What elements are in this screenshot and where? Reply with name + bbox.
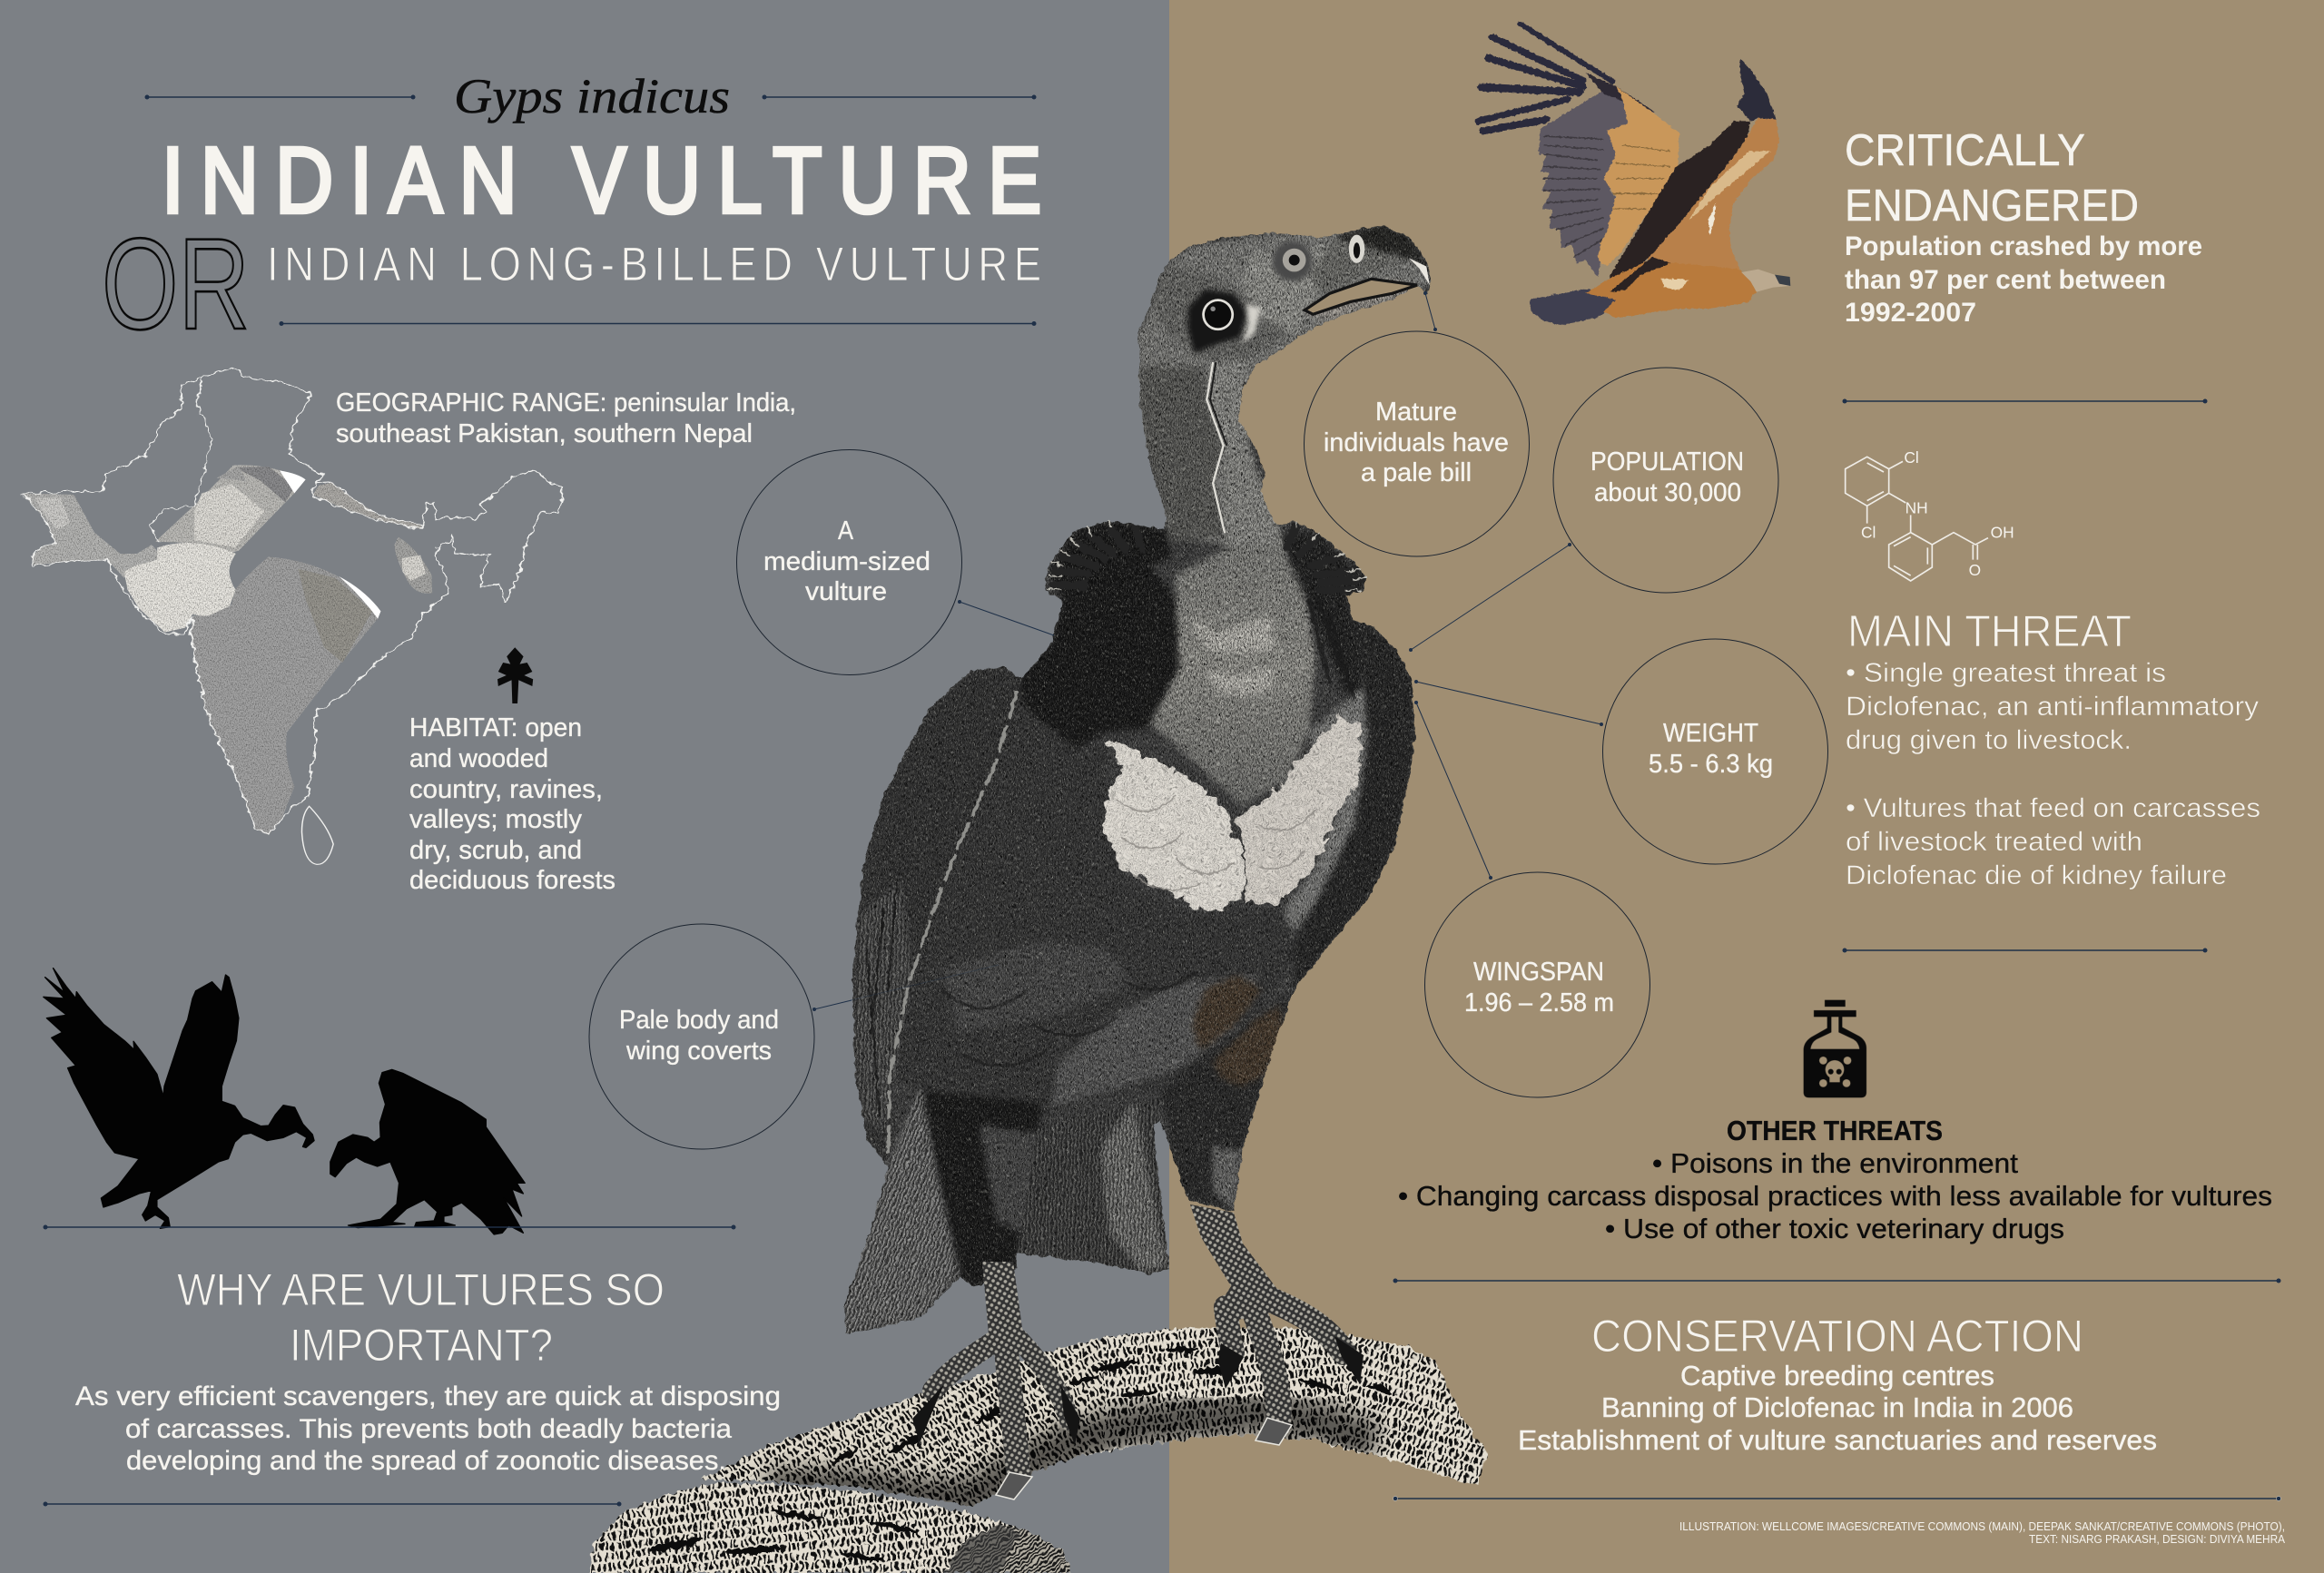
thighs and tail [1158, 991, 1292, 1212]
chemical structure of diclofenac: O [1969, 561, 1981, 579]
subtitle with outlined OR: OR [102, 212, 250, 357]
geographic range text [336, 388, 796, 448]
why important body text [44, 1381, 781, 1507]
other threats: • Poisons in the environment [1652, 1147, 2018, 1179]
population crash text [1843, 231, 2208, 403]
dark shoulder and ruff [1017, 521, 1179, 750]
population crash text: 1992-2007 [1845, 298, 1976, 328]
chemical structure of diclofenac: Cl [1904, 448, 1919, 467]
population crash text: than 97 per cent between [1845, 265, 2166, 295]
map of the Indian subcontinent [22, 368, 563, 864]
callout: weight: WEIGHT [1663, 719, 1758, 748]
nostril [1349, 235, 1364, 263]
heading: why are vultures so important: WHY ARE VULTURES SO [177, 1264, 665, 1315]
ruff tufts [1047, 521, 1366, 592]
habitat text: and wooded [409, 744, 548, 773]
callout: weight [1414, 639, 1828, 864]
icon: tree [497, 647, 533, 703]
main threat bullets: Diclofenac, an anti-inflammatory [1846, 692, 2259, 722]
engraved detail lines [867, 883, 896, 1116]
conservation action heading: CONSERVATION ACTION [1591, 1311, 2083, 1362]
background: tan right panel [1169, 0, 2324, 1573]
callout: wingspan [1414, 701, 1650, 1097]
photo: griffon vulture in flight [1478, 25, 1790, 325]
main threat bullets [1843, 658, 2260, 953]
neck seam [1206, 362, 1225, 533]
habitat text: valleys; mostly [409, 805, 582, 834]
other threats: OTHER THREATS [1727, 1115, 1943, 1146]
main threat bullets: Diclofenac die of kidney failure [1846, 860, 2227, 890]
critically endangered heading: ENDANGERED [1845, 182, 2139, 231]
feather line overlays [844, 1088, 959, 1333]
callout: mature individuals have a pale bill: individuals have [1324, 428, 1509, 457]
subtitle with outlined OR [102, 212, 1041, 357]
credits: TEXT: NISARG PRAKASH, DESIGN: DIVIYA MEHRA [2029, 1532, 2285, 1546]
other threats: • Use of other toxic veterinary drugs [1605, 1213, 2064, 1244]
main threat bullets: of livestock treated with [1846, 827, 2142, 857]
branch [590, 1327, 1487, 1573]
habitat text: dry, scrub, and [409, 836, 582, 865]
geographic range text: southeast Pakistan, southern Nepal [336, 419, 753, 448]
callout: wingspan: WINGSPAN [1473, 958, 1604, 987]
bill gape [1305, 279, 1417, 314]
other threats [1393, 1115, 2280, 1283]
callout: medium-sized vulture: medium-sized [763, 547, 931, 576]
callout: pale body and wing coverts: wing coverts [625, 1037, 772, 1066]
habitat text: deciduous forests [409, 866, 615, 895]
habitat text: country, ravines, [409, 775, 603, 804]
head and neck [1134, 225, 1433, 546]
callout: population [1409, 368, 1778, 652]
illustration: Indian vulture engraving [843, 225, 1431, 1334]
chest shield [1142, 546, 1315, 806]
background: grey left panel [0, 0, 1169, 1573]
critically endangered heading: CRITICALLY [1845, 126, 2085, 175]
main threat bullets: • Vultures that feed on carcasses [1846, 793, 2260, 823]
chemical structure of diclofenac: OH [1991, 524, 2014, 542]
callout: population: POPULATION [1590, 447, 1744, 477]
callout: mature individuals have a pale bill [1304, 291, 1529, 556]
callout: population: about 30,000 [1594, 478, 1741, 507]
callout: pale body and wing coverts [589, 924, 852, 1149]
upper eye [1272, 241, 1312, 281]
chemical structure of diclofenac: Cl [1861, 524, 1876, 542]
beak [1333, 225, 1429, 272]
other threats: • Changing carcass disposal practices with less available for vultures [1398, 1180, 2272, 1212]
why important body text: developing and the spread of zoonotic diseases. [126, 1446, 726, 1476]
callout: medium-sized vulture [737, 450, 1054, 675]
callout: wingspan: 1.96 – 2.58 m [1464, 988, 1614, 1018]
conservation action list: Banning of Diclofenac in India in 2006 [1601, 1391, 2073, 1423]
why important body text: of carcasses. This prevents both deadly bacteria [125, 1414, 732, 1444]
species name with rules [145, 69, 1037, 123]
silhouettes of two vultures on a rule [44, 968, 735, 1234]
chemical structure of diclofenac: NH [1905, 498, 1928, 516]
main threat heading: MAIN THREAT [1847, 607, 2132, 656]
right wing [1292, 621, 1415, 989]
callout: mature individuals have a pale bill: a pale bill [1361, 458, 1472, 487]
callout: pale body and wing coverts: Pale body and [619, 1006, 779, 1035]
subtitle with outlined OR: INDIAN LONG-BILLED VULTURE [267, 238, 1041, 291]
icon: poison bottle [1804, 1000, 1866, 1097]
conservation action list [1393, 1360, 2280, 1501]
credits [1679, 1519, 2285, 1546]
habitat text: HABITAT: open [409, 713, 582, 742]
heading: why are vultures so important [177, 1264, 665, 1371]
callout: medium-sized vulture: vulture [805, 577, 887, 606]
callout: weight: 5.5 - 6.3 kg [1649, 750, 1773, 779]
why important body text: As very efficient scavengers, they are quick at disposing [75, 1381, 781, 1411]
population crash text: Population crashed by more [1845, 231, 2202, 261]
callout: mature individuals have a pale bill: Mature [1375, 398, 1457, 427]
geographic range text: GEOGRAPHIC RANGE: peninsular India, [336, 388, 796, 418]
critically endangered heading [1845, 126, 2139, 231]
main threat bullets: • Single greatest threat is [1846, 658, 2166, 688]
title: INDIAN VULTURE [162, 129, 1041, 233]
white patches [1102, 716, 1363, 912]
faint leader through the body [851, 965, 999, 1000]
conservation action list: Captive breeding centres [1680, 1360, 1994, 1391]
species name with rules: Gyps indicus [454, 69, 730, 123]
conservation action list: Establishment of vulture sanctuaries and reserves [1518, 1424, 2157, 1456]
chemical structure of diclofenac [1846, 448, 2014, 581]
rust stains [1192, 975, 1261, 1050]
habitat text [409, 713, 615, 895]
feet with scales and claws [912, 1204, 1364, 1499]
large eye [1188, 290, 1247, 354]
callout: medium-sized vulture: A [838, 516, 854, 546]
main threat bullets: drug given to livestock. [1846, 725, 2132, 755]
lower body [902, 710, 1293, 1109]
credits: ILLUSTRATION: WELLCOME IMAGES/CREATIVE COMMONS (MAIN), DEEPAK SANKAT/CREATIVE COMMONS (PHOTO), [1679, 1519, 2285, 1533]
left wing [852, 666, 1021, 1167]
heading: why are vultures so important: IMPORTANT? [290, 1320, 553, 1371]
